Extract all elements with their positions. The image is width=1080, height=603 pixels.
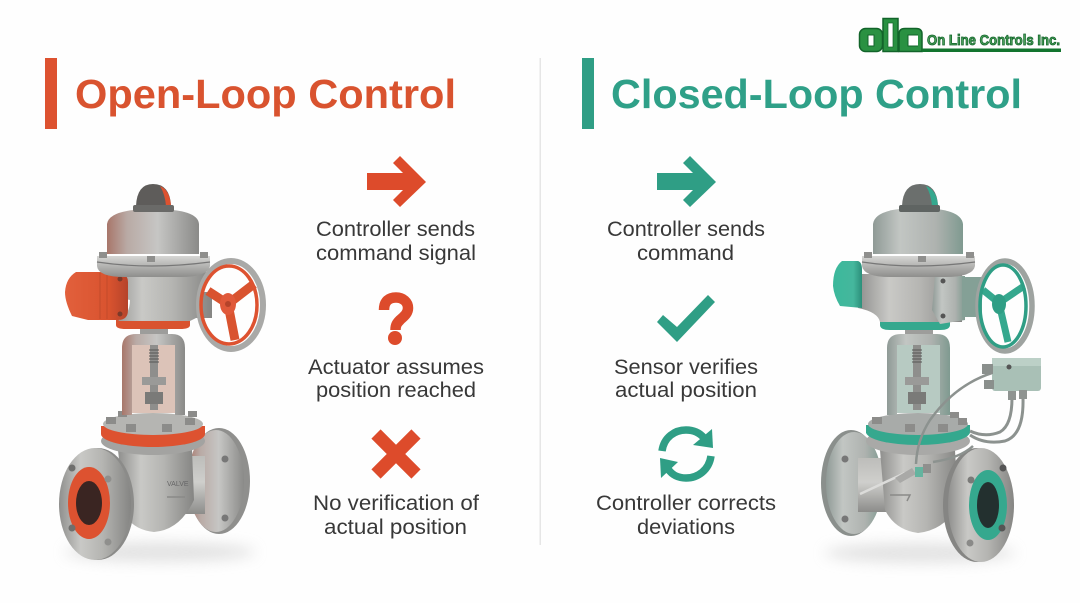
step text: no verification of actual position: No verification of [313,492,479,515]
yoke and stem [122,328,185,415]
icon: arrow [367,156,426,207]
step text: actuator assumes position reached [308,356,484,402]
valve body and pipes [118,450,205,532]
step text: controller sends command: command [637,242,734,265]
step text: actuator assumes position reached: position reached [316,379,476,402]
handwheel [199,261,263,349]
column: open-loop steps [308,156,484,539]
steel housing [112,272,212,321]
divider [540,58,541,545]
front flange [943,448,1014,562]
icon: refresh arrows [660,429,713,478]
icon: cross [376,434,416,474]
teal cover [833,261,862,308]
junction box [982,358,1041,400]
bonnet flange [101,411,205,455]
heading: closed-loop: Closed-Loop Control [611,71,1022,117]
front flange [59,448,134,560]
temperature sensor probe [860,464,931,494]
handwheel [978,261,1032,351]
valve body and pipes: VALVE [167,481,189,488]
step text: controller corrects deviations: Controller corrects [596,492,776,515]
lower housing [858,274,962,322]
step text: controller sends command signal: Controller sends [316,218,475,241]
sensor wiring [916,373,1023,464]
dome indicator [133,184,174,212]
step text: controller sends command: Controller sends [607,218,765,241]
cap [107,209,199,254]
step text: actuator assumes position reached: Actuator assumes [308,356,484,379]
logo: On Line Controls Inc. [860,18,1061,52]
icon: arrow [657,156,716,207]
floor shadow [65,542,255,562]
icon: question mark [384,298,408,345]
heading: open-loop [45,58,456,129]
floor shadow [825,543,1015,563]
heading: closed-loop [582,58,1022,129]
teal base plate [880,320,950,330]
step text: no verification of actual position [313,492,479,539]
step text: controller sends command [607,218,765,265]
valve: open-loop (orange accents) [59,184,263,562]
step text: controller corrects deviations [596,492,776,539]
flange [97,252,210,277]
valve: closed-loop (teal accents with sensor) [821,184,1041,563]
rear flange [821,430,882,536]
heading: open-loop: Open-Loop Control [75,71,456,117]
step text: controller corrects deviations: deviations [637,516,735,539]
step text: sensor verifies actual position: actual position [615,379,757,402]
logo: On Line Controls Inc.: On Line Controls Inc. [927,33,1060,49]
step text: sensor verifies actual position: Sensor verifies [614,356,758,379]
step text: controller sends command signal: command signal [316,242,476,265]
orange base plate [116,320,190,329]
dome indicator [899,184,940,212]
icon: check mark [657,295,715,342]
step text: sensor verifies actual position [614,356,758,402]
cap [873,208,963,254]
step text: no verification of actual position: actual position [324,516,467,539]
rear flange [188,428,250,534]
column: closed-loop steps [596,156,776,539]
orange cover [65,272,128,320]
valve body and pipes [858,450,958,533]
gearbox [932,276,982,324]
flange [862,252,975,277]
yoke and stem [887,328,950,415]
bonnet flange [866,412,970,455]
step text: controller sends command signal [316,218,476,265]
